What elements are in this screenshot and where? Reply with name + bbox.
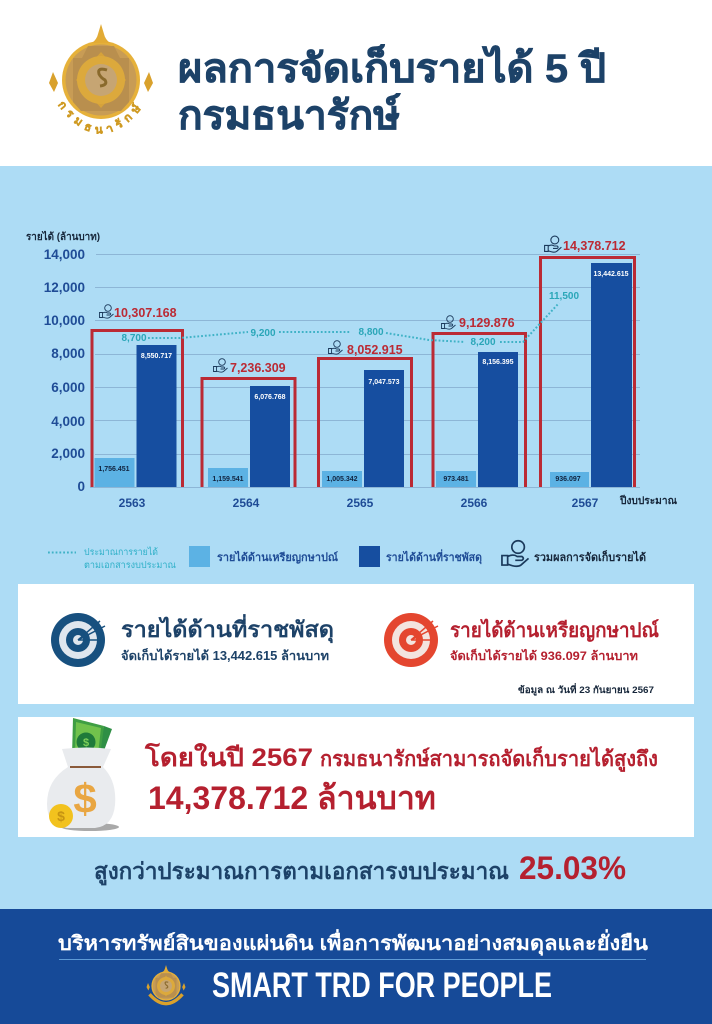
y axis title: รายได้ (ล้านบาท) — [26, 230, 100, 243]
footer slogan: บริหารทรัพย์สินของแผ่นดิน เพื่อการพัฒนาอย่างสมดุลและยั่งยืน — [58, 928, 648, 956]
gridlines and y axis labels: 6,000 — [51, 380, 85, 395]
total revenue labels: 10,307.168 — [114, 306, 177, 320]
gridlines and y axis labels: 10,000 — [44, 313, 85, 328]
budget estimate dotted line: 9,200 — [250, 328, 276, 339]
icon: money bag — [47, 718, 119, 831]
total revenue labels: 8,052.915 — [347, 343, 403, 357]
gridlines and y axis labels: 2,000 — [51, 446, 85, 461]
total revenue labels: 14,378.712 — [563, 239, 626, 253]
legend: ceremonial coin: รายได้ด้านเหรียญกษาปณ์ — [217, 550, 339, 564]
data date note: ข้อมูล ณ วันที่ 23 กันยายน 2567 — [518, 682, 654, 697]
bar value labels: 13,442.615 — [593, 271, 629, 278]
icon: money bag: $ — [83, 737, 89, 749]
title — [178, 43, 606, 138]
bar value labels — [98, 271, 629, 483]
summary sentence — [144, 742, 658, 773]
x axis year labels — [119, 496, 599, 510]
bar value labels: 6,076.768 — [254, 394, 286, 401]
budget estimate dotted line: 8,800 — [358, 327, 384, 338]
legend: budget estimate: ประมาณการรายได้ — [84, 546, 158, 558]
bar value labels: 8,550.717 — [141, 353, 172, 360]
icon: treasury department seal: กรมธนารักษ์ — [58, 102, 141, 134]
bars: state property revenue — [136, 263, 632, 487]
text: ceremonial coin revenue: รายได้ด้านเหรียญกษาปณ์ — [450, 618, 659, 642]
gridlines and y axis labels — [44, 247, 640, 494]
panel: footer banner — [0, 909, 712, 1024]
text: state property revenue: จัดเก็บได้รายได้ 13,442.615 ล้านบาท — [121, 648, 329, 663]
x axis year labels: 2566 — [461, 496, 488, 510]
gridlines and y axis labels: 4,000 — [51, 414, 85, 429]
text: state property revenue: รายได้ด้านที่ราชพัสดุ — [121, 613, 334, 644]
legend: ceremonial coin — [189, 546, 339, 567]
bar value labels: 1,159.541 — [212, 476, 244, 483]
bar value labels: 7,047.573 — [368, 379, 400, 386]
summary sentence: โดยในปี 2567 — [144, 742, 313, 772]
icon: red target — [384, 613, 438, 667]
footer tagline: SMART TRD FOR PEOPLE — [212, 966, 552, 1005]
x axis year labels: 2563 — [119, 496, 146, 510]
legend: total: รวมผลการจัดเก็บรายได้ — [534, 550, 646, 564]
gridlines and y axis labels: 8,000 — [51, 346, 85, 361]
bar value labels: 973.481 — [443, 476, 469, 483]
text: ceremonial coin revenue: จัดเก็บได้รายได้ 936.097 ล้านบาท — [450, 648, 638, 663]
text: state property revenue — [121, 613, 334, 663]
legend: state property — [359, 546, 482, 567]
icon: treasury department seal — [49, 24, 153, 134]
comparison with budget: 25.03% — [519, 850, 626, 886]
chart: revenue by fiscal year — [26, 230, 677, 510]
gridlines and y axis labels: 12,000 — [44, 280, 85, 295]
legend: total — [502, 541, 646, 566]
summary amount: 14,378.712 ล้านบาท — [148, 780, 436, 816]
legend — [48, 541, 646, 571]
x axis year labels: 2564 — [233, 496, 260, 510]
comparison with budget — [94, 850, 626, 886]
red total outlines — [92, 258, 634, 487]
icon: money bag: $ — [73, 775, 97, 822]
comparison with budget: สูงกว่าประมาณการตามเอกสารงบประมาณ — [94, 858, 509, 886]
total revenue labels: 7,236.309 — [230, 361, 286, 375]
x axis year labels: 2565 — [347, 496, 374, 510]
budget estimate dotted line — [121, 291, 579, 348]
bar value labels: 8,156.395 — [482, 359, 514, 366]
legend: state property: รายได้ด้านที่ราชพัสดุ — [386, 549, 482, 565]
text: ceremonial coin revenue — [450, 618, 659, 663]
panel: revenue highlights — [18, 584, 694, 704]
legend: budget estimate: ตามเอกสารงบประมาณ — [84, 560, 176, 571]
panel: 2567 summary — [18, 717, 694, 837]
title: ผลการจัดเก็บรายได้ 5 ปี — [178, 43, 606, 91]
gridlines and y axis labels: 14,000 — [44, 247, 85, 262]
total revenue labels: 9,129.876 — [459, 316, 515, 330]
panel: page background — [0, 166, 712, 910]
x axis year labels: 2567 — [572, 496, 599, 510]
summary sentence: กรมธนารักษ์สามารถจัดเก็บรายได้สูงถึง — [320, 745, 658, 773]
legend: budget estimate — [48, 546, 176, 571]
icon: money bag: $ — [57, 808, 65, 824]
gridlines and y axis labels: 0 — [77, 479, 85, 494]
bars: ceremonial coin revenue — [94, 458, 589, 487]
bar value labels: 936.097 — [555, 476, 581, 483]
x axis title: ปีงบประมาณ — [619, 494, 677, 507]
title: กรมธนารักษ์ — [178, 93, 401, 138]
icon: blue target — [51, 613, 105, 667]
icon: small seal — [146, 965, 186, 1004]
bar value labels: 1,756.451 — [98, 466, 130, 473]
budget estimate dotted line: 8,200 — [470, 337, 496, 348]
bar value labels: 1,005.342 — [326, 476, 358, 483]
budget estimate dotted line: 11,500 — [549, 291, 579, 302]
total revenue labels — [100, 236, 626, 375]
budget estimate dotted line: 8,700 — [121, 333, 147, 344]
